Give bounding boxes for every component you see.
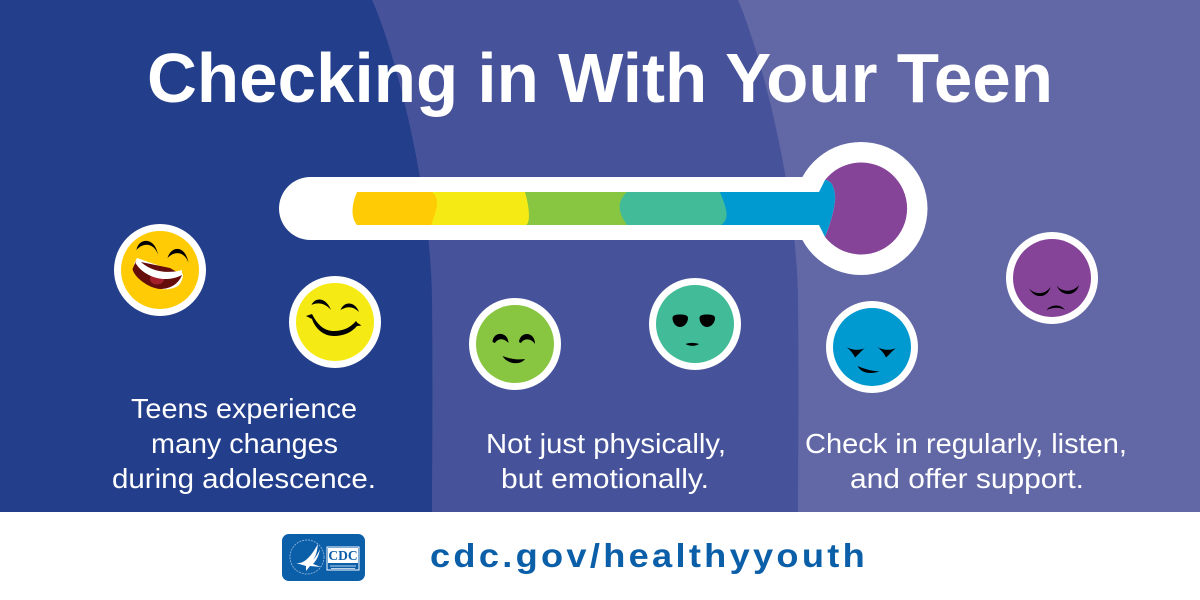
face: smiling [289, 276, 381, 368]
text: middle caption [486, 428, 726, 494]
text: middle caption: Not just physically, [486, 428, 726, 459]
face: laughing [114, 224, 206, 316]
text: right caption: and offer support. [850, 463, 1084, 494]
CDC logo: CDC [328, 548, 358, 563]
title: Checking in With Your Teen [147, 39, 1053, 117]
text: middle caption: but emotionally. [501, 463, 709, 494]
blue segment [700, 180, 835, 237]
orange segment [352, 192, 437, 225]
face: downcast [826, 301, 918, 393]
CDC logo [282, 534, 365, 581]
text: left caption: many changes [151, 428, 338, 459]
text: right caption [805, 428, 1127, 494]
website url: cdc.gov/healthyyouth [430, 537, 868, 574]
thermometer outline [279, 177, 839, 240]
bulb fill [825, 163, 907, 254]
green segment [510, 192, 640, 225]
face: sad [1006, 232, 1098, 324]
teal segment [620, 192, 727, 225]
face: neutral [649, 278, 741, 370]
text: right caption: Check in regularly, listen, [805, 428, 1127, 459]
text: left caption: during adolescence. [112, 463, 376, 494]
yellow segment [425, 192, 529, 225]
thermometer [279, 142, 928, 275]
text: left caption: Teens experience [131, 393, 357, 424]
text: left caption [112, 393, 376, 494]
footer bar [0, 512, 1200, 600]
face: content [469, 298, 561, 390]
